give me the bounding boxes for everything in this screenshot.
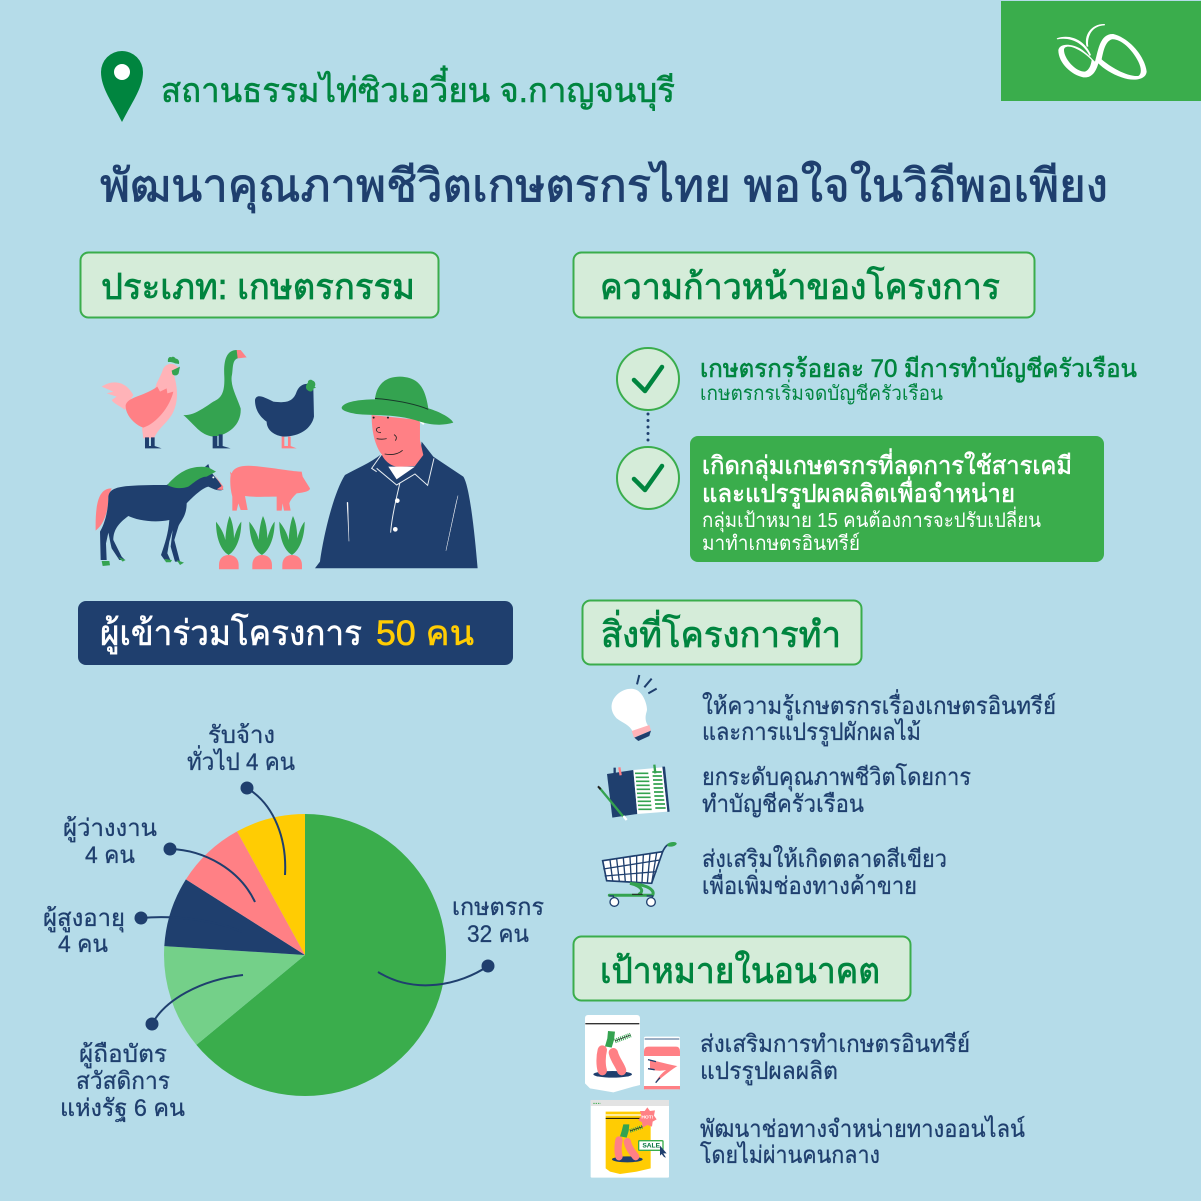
heading: what the project does: สิ่งที่โครงการทำ bbox=[601, 610, 841, 655]
icon: carrots bbox=[216, 516, 305, 569]
icon: check 1 bbox=[617, 348, 679, 410]
participants banner bbox=[78, 601, 513, 665]
participants banner: ผู้เข้าร่วมโครงการ bbox=[100, 613, 362, 654]
pie label: unemployed: ผู้ว่างงาน bbox=[63, 815, 157, 843]
title: พัฒนาคุณภาพชีวิตเกษตรกรไทย พอใจในวิถีพอเพียง bbox=[100, 160, 1108, 213]
icon: online store: HOT! bbox=[641, 1115, 654, 1121]
goal text 2: โดยไม่ผ่านคนกลาง bbox=[700, 1141, 880, 1169]
goal text 2: พัฒนาช่อทางจำหน่ายทางออนไลน์ bbox=[700, 1115, 1025, 1143]
icon: organic products bbox=[585, 1015, 680, 1092]
action text 2 bbox=[702, 763, 971, 818]
icon: check 2 bbox=[617, 447, 679, 509]
icon: light bulb bbox=[612, 675, 657, 741]
progress item 2 highlight: เกิดกลุ่มเกษตรกรที่ลดการใช้สารเคมี bbox=[702, 448, 1072, 481]
progress item 1 text bbox=[700, 355, 1137, 405]
pie label: elderly: ผู้สูงอายุ bbox=[43, 905, 125, 933]
progress item 1 text: เกษตรกรร้อยละ 70 มีการทำบัญชีครัวเรือน bbox=[700, 355, 1137, 383]
progress item 1 text: เกษตรกรเริ่มจดบัญชีครัวเรือน bbox=[700, 379, 943, 405]
action text 1: และการแปรรูปผักผลไม้ bbox=[702, 718, 921, 747]
icon: shopping cart bbox=[603, 842, 677, 906]
icon: online store bbox=[591, 1100, 669, 1178]
icon: location pin bbox=[101, 51, 143, 122]
pie label: general hire bbox=[187, 722, 295, 776]
icon: account book bbox=[598, 765, 670, 820]
action text 2: ทำบัญชีครัวเรือน bbox=[702, 791, 864, 818]
heading: what the project does bbox=[582, 600, 862, 664]
action text 1 bbox=[702, 689, 1056, 747]
pie label: welfare card holders bbox=[60, 1041, 185, 1122]
action text 3 bbox=[702, 845, 947, 900]
pie label: welfare card holders: สวัสดิการ bbox=[76, 1068, 170, 1095]
dotted connector bbox=[646, 414, 650, 446]
heading: future goals: เป้าหมายในอนาคต bbox=[600, 950, 880, 991]
icon: goose bbox=[183, 350, 247, 448]
pie chart bbox=[164, 814, 446, 1096]
participants banner: 50 คน bbox=[376, 614, 474, 653]
pie label: general hire: รับจ้าง bbox=[208, 722, 275, 749]
goal text 2 bbox=[700, 1115, 1025, 1169]
icon: horse bbox=[96, 464, 223, 566]
icon: online store: SALE bbox=[642, 1143, 661, 1150]
progress item 2 highlight: มาทำเกษตรอินทรีย์ bbox=[702, 532, 860, 555]
heading: category: ประเภท: เกษตรกรรม bbox=[101, 266, 415, 307]
progress item 2 highlight bbox=[690, 436, 1104, 562]
pie label: unemployed: 4 คน bbox=[85, 842, 135, 869]
action text 3: เพื่อเพิ่มช่องทางค้าขาย bbox=[702, 869, 917, 900]
icon: pig bbox=[230, 466, 310, 511]
pie label: farmers: 32 คน bbox=[467, 921, 529, 948]
progress item 2 highlight: กลุ่มเป้าหมาย 15 คนต้องการจะปรับเปลี่ยน bbox=[702, 506, 1041, 533]
heading: future goals bbox=[574, 936, 910, 1000]
logo panel bbox=[1001, 1, 1201, 101]
icon: hen bbox=[255, 380, 316, 448]
pie label: elderly bbox=[43, 905, 125, 958]
goal text 1: แปรรูปผลผลิต bbox=[700, 1058, 838, 1086]
heading: project progress: ความก้าวหน้าของโครงการ bbox=[600, 266, 1000, 307]
pie leader lines bbox=[134, 782, 494, 1030]
pie label: welfare card holders: ผู้ถือบัตร bbox=[79, 1041, 167, 1069]
pie label: welfare card holders: แห่งรัฐ 6 คน bbox=[60, 1095, 185, 1122]
illustration: farm animals and farmer bbox=[96, 350, 478, 569]
goal text 1: ส่งเสริมการทำเกษตรอินทรีย์ bbox=[700, 1030, 970, 1058]
goal text 1 bbox=[700, 1030, 970, 1086]
heading: project progress bbox=[574, 252, 1034, 318]
heading: category bbox=[80, 252, 438, 318]
action text 2: ยกระดับคุณภาพชีวิตโดยการ bbox=[702, 763, 971, 792]
pie label: elderly: 4 คน bbox=[58, 931, 108, 958]
location heading: สถานธรรมไท่ซิวเอวี๋ยน จ.กาญจนบุรี bbox=[161, 65, 675, 111]
action text 1: ให้ความรู้เกษตรกรเรื่องเกษตรอินทรีย์ bbox=[702, 689, 1056, 721]
illustration: farmer bbox=[315, 377, 478, 568]
pie label: general hire: ทั่วไป 4 คน bbox=[187, 745, 295, 776]
pie label: unemployed bbox=[63, 815, 157, 869]
pie label: farmers: เกษตรกร bbox=[452, 894, 544, 921]
pie label: farmers bbox=[452, 894, 544, 948]
action text 3: ส่งเสริมให้เกิดตลาดสีเขียว bbox=[702, 845, 947, 873]
icon: rooster bbox=[102, 357, 180, 448]
progress item 2 highlight: และแปรรูปผลผลิตเพื่อจำหน่าย bbox=[702, 476, 1015, 509]
